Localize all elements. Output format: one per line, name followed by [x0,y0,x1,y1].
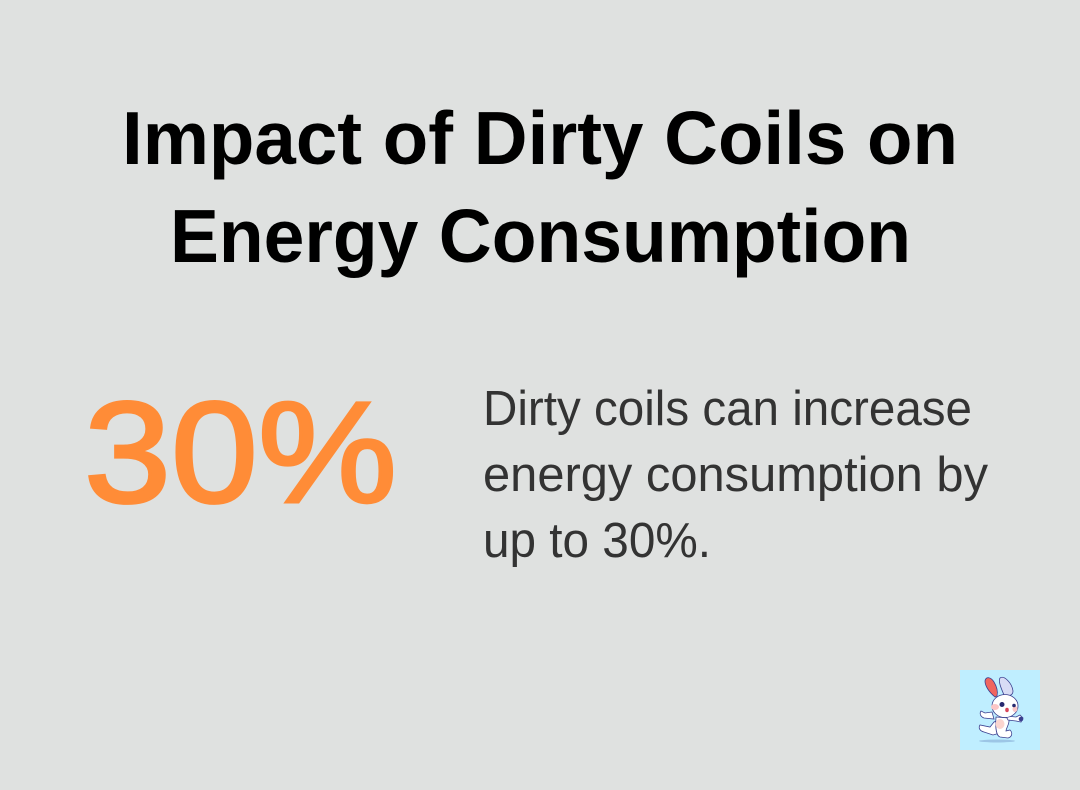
description text: Dirty coils can increase [483,382,972,436]
bunny body and limbs [979,711,1023,738]
title [122,96,958,278]
statistic: 30%: 30% [84,372,397,533]
icon: bunny logo [960,670,1040,750]
title: Impact of Dirty Coils on [122,96,958,180]
description text: up to 30%. [483,514,711,568]
description text [483,382,988,568]
title: Energy Consumption [170,194,911,278]
bunny head [992,694,1018,718]
description text: energy consumption by [483,448,988,502]
bunny ears [985,677,1013,697]
